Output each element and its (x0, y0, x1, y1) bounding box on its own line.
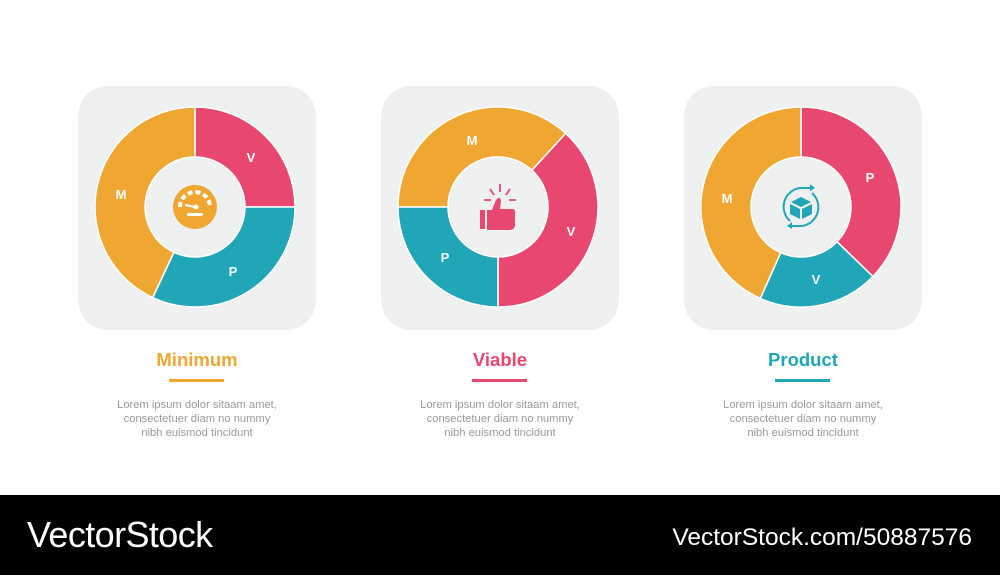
segment labels: V (812, 272, 821, 287)
segment labels: P (229, 264, 238, 279)
heading: Product: Product (768, 349, 838, 370)
segment labels: V (567, 224, 576, 239)
text block: minimum: Lorem ipsum dolor sitaam amet, (117, 399, 277, 411)
heading: Product (768, 349, 838, 382)
text block: product: consectetuer diam no nummy (730, 413, 877, 425)
segment labels: P (866, 170, 875, 185)
panel: product (684, 86, 922, 330)
heading: Viable: Viable (473, 349, 527, 370)
segment labels (441, 133, 576, 265)
footer bar: VectorStock (27, 514, 214, 555)
icon: speedometer (173, 185, 217, 229)
panel: viable (381, 86, 619, 330)
segment labels (722, 170, 875, 287)
donut chart: product (701, 107, 901, 307)
segment labels: M (467, 133, 477, 148)
footer bar (0, 495, 1000, 575)
text block: minimum: consectetuer diam no nummy (124, 413, 271, 425)
segment labels: P (441, 250, 450, 265)
heading: Minimum: Minimum (156, 349, 238, 370)
text block: product: Lorem ipsum dolor sitaam amet, (723, 399, 883, 411)
heading: Minimum (156, 349, 238, 382)
segment labels (116, 150, 256, 279)
donut chart: minimum (95, 107, 295, 307)
text block: product: nibh euismod tincidunt (747, 427, 860, 439)
donut chart: viable (398, 107, 598, 307)
text block: viable: nibh euismod tincidunt (444, 427, 557, 439)
segment labels: V (247, 150, 256, 165)
icon: box with rotating arrows (784, 184, 818, 229)
footer bar: VectorStock.com/50887576 (672, 524, 972, 551)
text block: viable (420, 399, 580, 439)
panel: minimum (78, 86, 316, 330)
text block: minimum (117, 399, 277, 439)
segment labels: M (116, 187, 126, 202)
text block: viable: Lorem ipsum dolor sitaam amet, (420, 399, 580, 411)
text block: product (723, 399, 883, 439)
text block: minimum: nibh euismod tincidunt (141, 427, 254, 439)
icon: thumbs up (480, 184, 516, 230)
text block: viable: consectetuer diam no nummy (427, 413, 574, 425)
heading: Viable (472, 349, 527, 382)
segment labels: M (722, 191, 732, 206)
